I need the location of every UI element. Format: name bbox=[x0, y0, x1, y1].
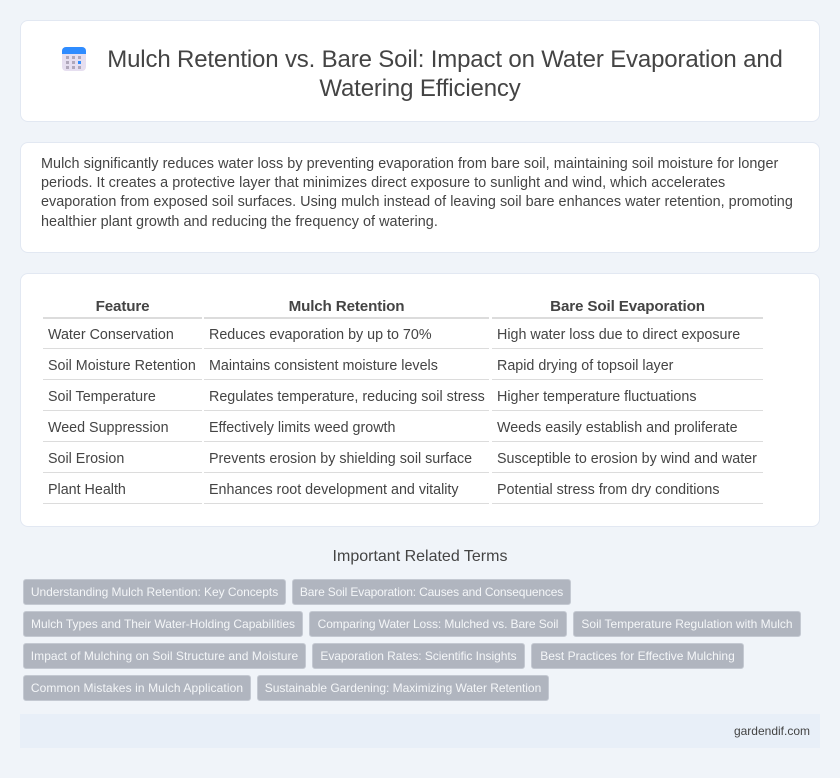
table row: water conservation: Water Conservation bbox=[48, 327, 174, 343]
tag bbox=[23, 643, 306, 669]
tag bbox=[23, 579, 286, 605]
table row: plant health: Plant Health bbox=[48, 482, 126, 498]
table row: weed suppression bbox=[43, 420, 763, 442]
tag list: related terms bbox=[23, 579, 801, 701]
table row: soil temperature: Higher temperature fluctuations bbox=[497, 389, 696, 405]
panel: header bbox=[20, 20, 820, 122]
table row: soil erosion: Prevents erosion by shielding soil surface bbox=[209, 451, 472, 467]
tag: Common Mistakes in Mulch Application bbox=[31, 681, 243, 695]
table: header row: Feature bbox=[96, 298, 149, 315]
title: Mulch Retention vs. Bare Soil: Impact on Water Evaporation and bbox=[107, 46, 783, 73]
tag bbox=[531, 643, 744, 669]
tag bbox=[292, 579, 571, 605]
tag: Comparing Water Loss: Mulched vs. Bare Soil bbox=[318, 617, 558, 631]
tag: Evaporation Rates: Scientific Insights bbox=[320, 649, 517, 663]
tag bbox=[573, 611, 801, 637]
tag bbox=[309, 611, 567, 637]
table row: weed suppression: Effectively limits weed growth bbox=[209, 420, 395, 436]
tag bbox=[257, 675, 549, 701]
text block: introduction: healthier plant growth and reducing the frequency of watering. bbox=[41, 214, 438, 230]
icon: calendar bbox=[62, 47, 86, 71]
panel: introduction bbox=[20, 142, 820, 253]
table row: soil moisture retention: Soil Moisture Retention bbox=[48, 358, 196, 374]
table row: water conservation: Reduces evaporation by up to 70% bbox=[209, 327, 432, 343]
table row: soil moisture retention: Rapid drying of topsoil layer bbox=[497, 358, 673, 374]
title: Watering Efficiency bbox=[319, 75, 521, 102]
footer bbox=[20, 714, 820, 748]
table row: soil erosion: Susceptible to erosion by wind and water bbox=[497, 451, 757, 467]
tag: Bare Soil Evaporation: Causes and Consequences bbox=[300, 585, 563, 599]
table row: soil moisture retention bbox=[43, 358, 763, 380]
tag: Best Practices for Effective Mulching bbox=[540, 649, 735, 663]
table row: water conservation: High water loss due to direct exposure bbox=[497, 327, 740, 343]
table: header row: Bare Soil Evaporation bbox=[550, 298, 705, 315]
table row: soil temperature bbox=[43, 389, 763, 411]
tag: Understanding Mulch Retention: Key Concepts bbox=[31, 585, 278, 599]
table row: soil erosion: Soil Erosion bbox=[48, 451, 124, 467]
table row: plant health: Potential stress from dry conditions bbox=[497, 482, 720, 498]
tag bbox=[312, 643, 525, 669]
text block: introduction: evaporation from exposed soil surfaces. Using mulch instead of leaving soil bare enhances water retention, promoting bbox=[41, 194, 793, 210]
tag bbox=[23, 675, 251, 701]
panel: comparison table bbox=[20, 273, 820, 527]
table row: soil temperature: Soil Temperature bbox=[48, 389, 156, 405]
table row: weed suppression: Weeds easily establish and proliferate bbox=[497, 420, 738, 436]
table row: weed suppression: Weed Suppression bbox=[48, 420, 169, 436]
text block: introduction: periods. It creates a protective layer that minimizes direct exposure to sunlight and wind, which accelerates bbox=[41, 175, 725, 191]
text block: introduction bbox=[41, 156, 793, 230]
table row: soil erosion bbox=[43, 451, 763, 473]
tag: Impact of Mulching on Soil Structure and Moisture bbox=[31, 649, 298, 663]
table row: soil temperature: Regulates temperature, reducing soil stress bbox=[209, 389, 485, 405]
title bbox=[107, 46, 783, 102]
footer: gardendif.com bbox=[734, 724, 810, 738]
tag: Soil Temperature Regulation with Mulch bbox=[581, 617, 793, 631]
table row: plant health bbox=[43, 482, 763, 504]
tag: Mulch Types and Their Water-Holding Capabilities bbox=[31, 617, 295, 631]
table: header row bbox=[43, 298, 763, 319]
table row: soil moisture retention: Maintains consistent moisture levels bbox=[209, 358, 438, 374]
tag: Sustainable Gardening: Maximizing Water Retention bbox=[265, 681, 541, 695]
table: header row: Mulch Retention bbox=[289, 298, 404, 315]
tag bbox=[23, 611, 303, 637]
table row: plant health: Enhances root development and vitality bbox=[209, 482, 459, 498]
table row: water conservation bbox=[43, 327, 763, 349]
heading: important related terms: Important Related Terms bbox=[333, 548, 507, 565]
text block: introduction: Mulch significantly reduces water loss by preventing evaporation from bare soil, maintaining soil moisture for longer bbox=[41, 156, 778, 172]
